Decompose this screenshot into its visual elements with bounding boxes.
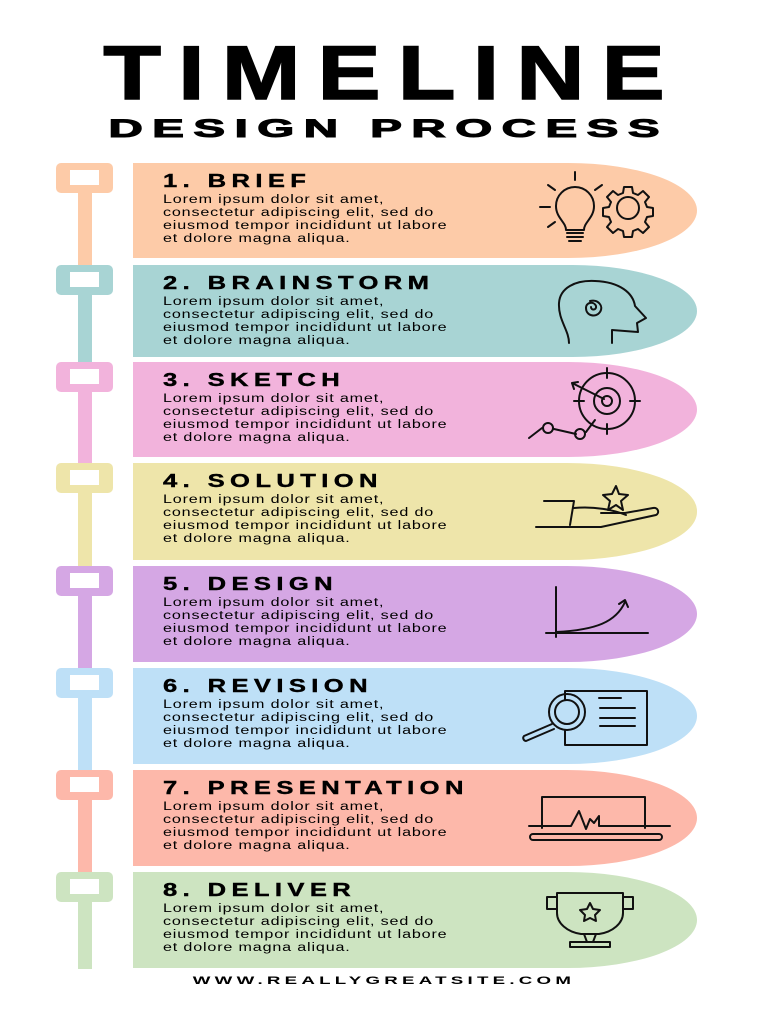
- panel: brief: 1. BRIEF: [163, 171, 311, 191]
- node 5: [56, 566, 113, 596]
- panel: brief: Lorem ipsum dolor sit amet,: [163, 194, 384, 206]
- icon: head: [558, 280, 647, 344]
- panel: brief: eiusmod tempor incididunt ut labore: [163, 220, 447, 232]
- panel: presentation: consectetur adipiscing elit, sed do: [163, 814, 434, 826]
- icon: target: [528, 367, 641, 440]
- panel: deliver: [133, 872, 697, 968]
- icon: magnifier doc: [522, 690, 648, 746]
- panel: design: consectetur adipiscing elit, sed do: [163, 610, 434, 622]
- panel: brief: consectetur adipiscing elit, sed do: [163, 207, 434, 219]
- panel: brainstorm: consectetur adipiscing elit, sed do: [163, 309, 434, 321]
- panel: presentation: [133, 770, 697, 866]
- panel: presentation: eiusmod tempor incididunt ut labore: [163, 827, 447, 839]
- timeline rail: [56, 163, 113, 969]
- panel: solution: et dolore magna aliqua.: [163, 533, 351, 545]
- panel: solution: Lorem ipsum dolor sit amet,: [163, 494, 384, 506]
- panel: sketch: 3. SKETCH: [163, 370, 345, 390]
- panel: brief: [133, 163, 697, 258]
- panel: revision: Lorem ipsum dolor sit amet,: [163, 699, 384, 711]
- node 2: [56, 265, 113, 295]
- node 3: [56, 362, 113, 392]
- panel: brainstorm: Lorem ipsum dolor sit amet,: [163, 296, 384, 308]
- panel: deliver: et dolore magna aliqua.: [163, 942, 351, 954]
- panel: revision: 6. REVISION: [163, 676, 373, 696]
- panel: design: 5. DESIGN: [163, 574, 338, 594]
- icon: laptop: [528, 796, 671, 841]
- panel: brainstorm: 2. BRAINSTORM: [163, 273, 434, 293]
- panel: solution: [133, 463, 697, 560]
- panel: sketch: eiusmod tempor incididunt ut labore: [163, 419, 447, 431]
- panel: deliver: 8. DELIVER: [163, 880, 356, 900]
- panel: brief: et dolore magna aliqua.: [163, 233, 351, 245]
- panel: deliver: Lorem ipsum dolor sit amet,: [163, 903, 384, 915]
- panel: solution: 4. SOLUTION: [163, 471, 383, 491]
- panel: design: Lorem ipsum dolor sit amet,: [163, 597, 384, 609]
- panel: deliver: consectetur adipiscing elit, sed do: [163, 916, 434, 928]
- panel: revision: et dolore magna aliqua.: [163, 738, 351, 750]
- panel: revision: consectetur adipiscing elit, sed do: [163, 712, 434, 724]
- title: TIMELINE: [103, 31, 682, 116]
- icon: bulb and gear: [539, 171, 654, 242]
- panel: sketch: consectetur adipiscing elit, sed do: [163, 406, 434, 418]
- panel: revision: [133, 668, 697, 764]
- panel: presentation: 7. PRESENTATION: [163, 778, 469, 798]
- panel: sketch: et dolore magna aliqua.: [163, 432, 351, 444]
- panel: solution: eiusmod tempor incididunt ut labore: [163, 520, 447, 532]
- footer url: WWW.REALLYGREATSITE.COM: [193, 975, 575, 987]
- panel: sketch: [133, 362, 697, 457]
- node 8: [56, 872, 113, 902]
- panel: presentation: et dolore magna aliqua.: [163, 840, 351, 852]
- panel: design: et dolore magna aliqua.: [163, 636, 351, 648]
- panel: sketch: Lorem ipsum dolor sit amet,: [163, 393, 384, 405]
- icon: trophy: [546, 892, 634, 948]
- node 7: [56, 770, 113, 800]
- panel: presentation: Lorem ipsum dolor sit amet,: [163, 801, 384, 813]
- node 4: [56, 463, 113, 493]
- panel: brainstorm: et dolore magna aliqua.: [163, 335, 351, 347]
- panel: brainstorm: [133, 265, 697, 357]
- panel: brainstorm: eiusmod tempor incididunt ut labore: [163, 322, 447, 334]
- icon: growth chart: [545, 586, 649, 638]
- node 1: [56, 163, 113, 193]
- panel: deliver: eiusmod tempor incididunt ut labore: [163, 929, 447, 941]
- panel: revision: eiusmod tempor incididunt ut labore: [163, 725, 447, 737]
- panel: design: eiusmod tempor incididunt ut labore: [163, 623, 447, 635]
- subtitle: DESIGN PROCESS: [108, 115, 669, 143]
- node 6: [56, 668, 113, 698]
- icon: hand with star: [535, 485, 660, 528]
- panel: design: [133, 566, 697, 662]
- panel: solution: consectetur adipiscing elit, sed do: [163, 507, 434, 519]
